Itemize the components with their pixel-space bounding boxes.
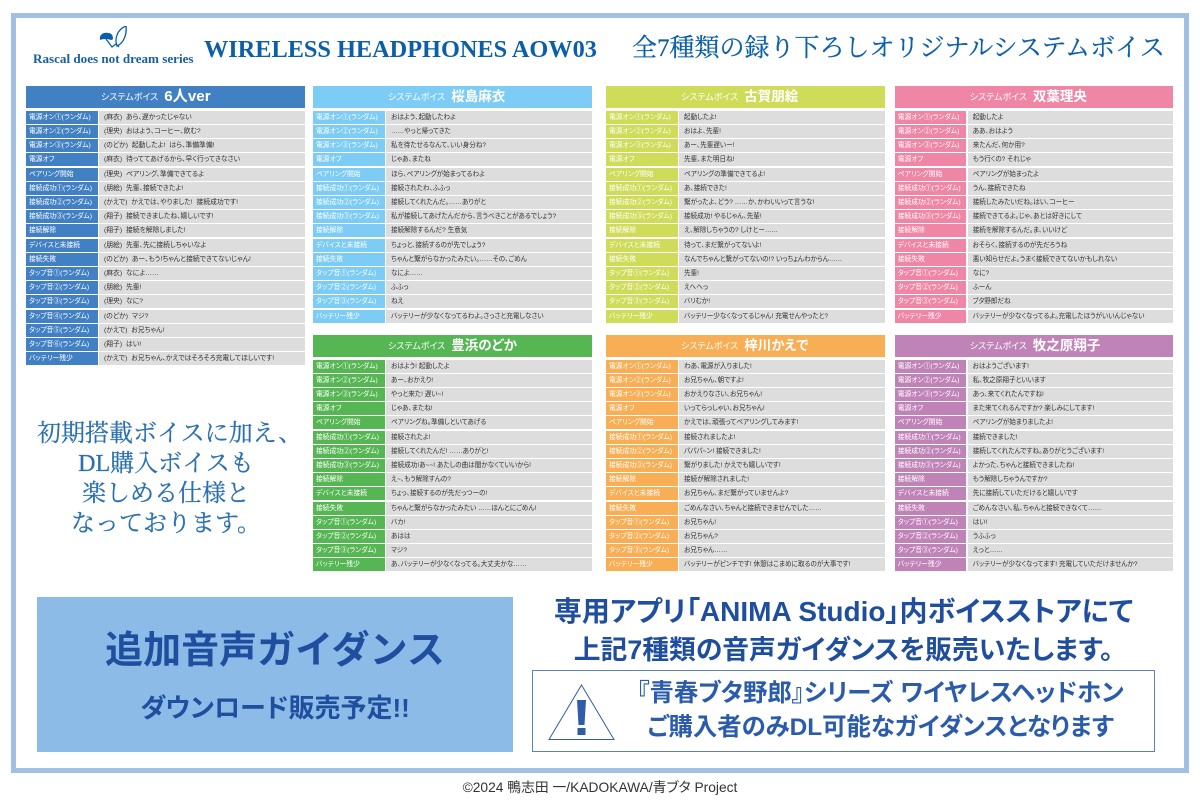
panel: 豊浜のどか: 接続されたよ! [391,434,431,441]
panel: 桜島麻衣: おはよう、起動したわよ [391,114,456,121]
panel: 桜島麻衣: ほら、ペアリングが始まってるわよ [391,171,485,178]
panel: 桜島麻衣: 接続解除するんだ? 生意気 [391,227,467,234]
panel: 梓川かえで: ペアリング開始 [609,419,654,426]
panel: 梓川かえで: 接続成功①(ランダム) [609,434,672,441]
panel: 豊浜のどか: ペアリングね。準備しといてあげる [391,419,486,426]
panel: 牧之原翔子: 接続成功③(ランダム) [898,462,961,469]
panel: 桜島麻衣: 接続してくれたんだ。……ありがと [391,199,486,206]
callout: purchaser only notice [532,670,1155,752]
panel: 双葉理央 [895,86,1173,323]
panel: 牧之原翔子: また来てくれるんですか? 楽しみにしてます! [973,405,1094,412]
panel: 6人ver: (理央) なに? [104,298,143,305]
panel: 桜島麻衣: じゃあ、またね [391,156,431,163]
panel: 梓川かえで: お兄ちゃん…… [684,547,727,554]
panel: 牧之原翔子: うふふっ [973,533,996,540]
panel: 牧之原翔子: 電源オン①(ランダム) [898,363,959,370]
panel: 双葉理央: 電源オン②(ランダム) [898,128,959,135]
panel: 牧之原翔子: 先に接続していただけると嬉しいです [973,490,1078,497]
panel: 6人ver [26,86,305,365]
panel: 牧之原翔子: 電源オフ [898,405,923,412]
panel: 双葉理央: デバイスと未接続 [898,242,949,249]
panel: 梓川かえで: パパパ~ン! 接続できました! [684,448,761,455]
panel: 豊浜のどか: 接続成功!あ~~! あたしの曲は聞かなくていいから! [391,462,531,469]
logo: Rascal does not dream series [33,26,194,66]
panel: 梓川かえで: タップ音①(ランダム) [609,519,669,526]
panel: 古賀朋絵: 電源オン②(ランダム) [609,128,671,135]
panel: 6人ver: 電源オン①(ランダム) [29,114,91,121]
panel: 桜島麻衣: 私を待たせるなんて、いい身分ね? [391,142,486,149]
panel: 牧之原翔子: ペアリング開始 [898,419,942,426]
panel heading [26,86,304,108]
panel: 6人ver: (のどか) マジ? [104,312,148,320]
panel: 古賀朋絵: なんでちゃんと繋がってないの!? いっちょんわからん…… [684,256,842,263]
panel: additional voice guidance [37,597,513,752]
panel: 桜島麻衣: ねえ [391,298,404,305]
panel: 牧之原翔子: タップ音①(ランダム) [898,519,958,526]
panel: 6人ver: タップ音②(ランダム) [29,284,89,291]
text block: voice note: 楽しめる仕様と [82,481,250,507]
panel: 6人ver: (麻衣) あら、遅かったじゃない [104,114,192,121]
panel: 梓川かえで [606,335,885,571]
panel: 双葉理央: 悪い知らせだよ。うまく接続できてないかもしれない [973,256,1117,263]
panel: 桜島麻衣: ちゃんと繋がらなかったみたい。……その、ごめん [391,256,527,263]
panel heading: システムボイス 豊浜のどか [388,338,517,352]
panel: 梓川かえで: タップ音③(ランダム) [609,547,669,554]
panel: 桜島麻衣 [313,86,592,323]
panel: 古賀朋絵: あー、先輩遅いー! [684,142,734,149]
text block: app store notice: 上記7種類の音声ガイダンスを販売いたします。 [574,635,1113,665]
icon: rabbit [100,26,127,48]
panel: 梓川かえで: 接続解除 [609,476,636,483]
panel heading [606,86,884,108]
panel: 牧之原翔子: もう解除しちゃうんですか? [973,476,1048,483]
panel: 双葉理央: ブタ野郎だね [973,298,1011,305]
panel: 梓川かえで: 電源オン②(ランダム) [609,377,671,384]
panel: 古賀朋絵: 接続成功③(ランダム) [609,213,672,220]
text block: app store notice [554,596,1133,665]
panel: 牧之原翔子: バッテリー残少 [898,561,942,568]
panel: 古賀朋絵: ペアリング開始 [609,171,654,178]
panel: 梓川かえで: バッテリー残少 [609,561,653,568]
panel: 豊浜のどか: タップ音③(ランダム) [316,547,376,554]
panel: 牧之原翔子: バッテリーが少なくなってます! 充電していただけませんか? [973,561,1138,568]
panel: 6人ver: タップ音④(ランダム) [29,312,89,320]
panel heading: システムボイス 梓川かえで [681,338,808,352]
panel: 梓川かえで: ごめんなさい、ちゃんと接続できませんでした…… [684,505,822,512]
panel: 6人ver: 電源オン②(ランダム) [29,128,91,135]
panel: 牧之原翔子 [895,335,1173,571]
panel: 豊浜のどか: 接続成功②(ランダム) [316,448,379,455]
panel: 双葉理央: 接続失敗 [898,256,925,263]
panel: 桜島麻衣: 電源オン③(ランダム) [316,142,378,149]
panel: 豊浜のどか: おはよう! 起動したよ [391,363,450,370]
panel: 豊浜のどか: 電源オン③(ランダム) [316,391,378,398]
panel: 梓川かえで: かえでは、頑張ってペアリングしてみます! [684,419,798,426]
panel: 双葉理央: ペアリングが始まったよ [973,171,1039,178]
panel: 桜島麻衣: 接続成功②(ランダム) [316,199,379,206]
panel: 梓川かえで: お兄ちゃん! [684,519,716,526]
panel heading [606,334,884,357]
panel: 豊浜のどか: 接続失敗 [316,505,343,512]
panel: 古賀朋絵: 接続成功①(ランダム) [609,185,672,192]
panel: 牧之原翔子: 電源オン③(ランダム) [898,391,959,398]
panel: 梓川かえで: 接続が解除されました! [684,476,749,483]
panel: 6人ver: (のどか) 起動したよ! はら、準備準備! [104,142,215,149]
panel: 豊浜のどか: 接続解除 [316,476,343,483]
panel: 桜島麻衣: 接続されたわ、ふふっ [391,185,450,192]
panel: 牧之原翔子: ごめんなさい、私、ちゃんと接続できなくて…… [973,505,1101,512]
panel: 6人ver: (理央) おはよう、コーヒー、飲む? [104,128,201,135]
panel: 双葉理央: バッテリー残少 [898,312,942,320]
panel: 豊浜のどか: タップ音②(ランダム) [316,533,376,540]
panel: 桜島麻衣: デバイスと未接続 [316,242,367,249]
panel: 豊浜のどか: ちょっ、接続するのが先だっつーの! [391,490,487,497]
panel: 梓川かえで: 接続されましたよ! [684,434,735,441]
panel: 豊浜のどか: 電源オフ [316,405,342,412]
panel: 牧之原翔子: デバイスと未接続 [898,490,949,497]
copyright: ©2024 鴨志田 一/KADOKAWA/青ブタ Project [463,780,737,795]
panel: 桜島麻衣: 私が接続してあげたんだから、言うべきことがあるでしょう? [391,213,556,220]
panel: 双葉理央: 接続成功③(ランダム) [898,213,961,220]
text block: voice note: なっております。 [71,511,261,537]
panel: 6人ver: バッテリー残少 [29,355,73,362]
panel: 桜島麻衣: 接続失敗 [316,256,343,263]
panel: 古賀朋絵: おはよ、先輩! [684,128,721,135]
panel: 古賀朋絵: 繋がったよ、どう? ……か、かわいいって言うな! [684,199,814,206]
panel: 梓川かえで: お兄ちゃん、まだ繋がっていませんよ? [684,490,788,497]
panel: 牧之原翔子: 電源オン②(ランダム) [898,377,959,384]
panel: 双葉理央: 接続したみたいだね。はい、コーヒー [973,199,1075,206]
panel: 古賀朋絵: ペアリングの準備できてるよ! [684,171,765,178]
panel: 豊浜のどか: あー、おかえり! [391,377,433,384]
notice text: ご購入者のみDL可能なガイダンスとなります [647,714,1114,741]
panel: 古賀朋絵: デバイスと未接続 [609,242,660,249]
panel: 豊浜のどか: 接続してくれたんだ! ……ありがと! [391,448,489,455]
panel: 豊浜のどか: バッテリー残少 [316,561,360,568]
panel: 古賀朋絵: 電源オン①(ランダム) [609,114,671,121]
text block: app store notice: 専用アプリ「ANIMA Studio」内ボイスストアにて [554,596,1133,627]
panel: 古賀朋絵: 接続解除 [609,227,636,234]
panel: 6人ver: (朋絵) 先輩、接続できたよ! [104,185,183,192]
panel: 桜島麻衣: ふふっ [391,284,409,291]
panel: 双葉理央: 接続成功②(ランダム) [898,199,961,206]
panel: 6人ver: デバイスと未接続 [29,242,80,249]
panel: 牧之原翔子: よかった、ちゃんと接続できましたね! [973,462,1074,469]
panel: 牧之原翔子: タップ音③(ランダム) [898,547,958,554]
panel: 梓川かえで: お兄ちゃん? [684,533,718,540]
panel: 双葉理央: タップ音②(ランダム) [898,284,958,291]
panel: 古賀朋絵: あ、接続できた! [684,185,727,192]
panel heading: システムボイス 桜島麻衣 [388,89,505,104]
panel: 豊浜のどか: バカ! [391,519,405,526]
panel: 6人ver: 電源オフ [29,156,55,163]
panel: 桜島麻衣: 接続成功①(ランダム) [316,185,379,192]
panel: 牧之原翔子: ペアリングが始まりましたよ! [973,419,1053,426]
panel: 6人ver: 接続失敗 [29,256,56,263]
panel: 双葉理央: バッテリーが少なくなってるよ。充電したほうがいいんじゃない [973,312,1144,320]
panel: 6人ver: (かえで) お兄ちゃん、かえではそろそろ充電してほしいです! [104,355,274,362]
text block: voice note: 初期搭載ボイスに加え、 [37,421,302,447]
panel: 6人ver: 接続解除 [29,227,56,234]
panel: 梓川かえで: タップ音②(ランダム) [609,533,669,540]
panel: 梓川かえで: わあ、電源が入りました! [684,363,752,370]
panel: 梓川かえで: 接続成功②(ランダム) [609,448,672,455]
text: download sale: ダウンロード販売予定!! [140,693,410,723]
panel: 6人ver: タップ音①(ランダム) [29,270,89,277]
panel: 桜島麻衣: 電源オフ [316,156,342,163]
panel heading [313,334,592,357]
panel: 6人ver: 接続成功②(ランダム) [29,199,92,206]
panel: 梓川かえで: おかえりなさい、お兄ちゃん! [684,391,762,398]
panel: 梓川かえで: 接続失敗 [609,505,636,512]
panel: 梓川かえで: いってらっしゃい、お兄ちゃん! [684,405,765,412]
panel: 6人ver: (朋絵) 先輩! [104,284,142,291]
panel: 古賀朋絵: 接続成功②(ランダム) [609,199,672,206]
panel: 双葉理央: 電源オン①(ランダム) [898,114,959,121]
panel: 古賀朋絵: タップ音②(ランダム) [609,284,669,291]
panel: 牧之原翔子: タップ音②(ランダム) [898,533,958,540]
panel heading: システムボイス 6人ver [101,88,211,105]
panel: 牧之原翔子: 接続解除 [898,476,925,483]
panel: 豊浜のどか: じゃあ、またね! [391,405,433,412]
panel: 桜島麻衣: タップ音①(ランダム) [316,270,376,277]
panel: 豊浜のどか: タップ音①(ランダム) [316,519,376,526]
panel: 6人ver: タップ音⑤(ランダム) [29,327,89,334]
panel: 双葉理央: おそらく、接続するのが先だろうね [973,242,1067,249]
panel: 双葉理央: タップ音③(ランダム) [898,298,958,305]
panel: 牧之原翔子: 接続成功①(ランダム) [898,434,961,441]
panel: 牧之原翔子: 接続できました! [973,434,1018,441]
panel: 桜島麻衣: なによ…… [391,270,423,277]
panel: 豊浜のどか: ちゃんと繋がらなかったみたい ……ほんとにごめん! [391,505,536,512]
panel: 豊浜のどか: デバイスと未接続 [316,490,367,497]
panel: 6人ver: (麻衣) なによ…… [104,270,159,277]
panel: 古賀朋絵: バリむか! [684,298,710,305]
panel: 双葉理央: 接続成功①(ランダム) [898,185,961,192]
panel: 桜島麻衣: 電源オン②(ランダム) [316,128,378,135]
panel: 6人ver: 電源オン③(ランダム) [29,142,91,149]
subtitle: 全7種類の録り下ろしオリジナルシステムボイス [632,35,1165,62]
heading: additional voice guidance: 追加音声ガイダンス [105,630,445,672]
panel: 双葉理央: 来たんだ、何か用? [973,142,1025,149]
panel: 6人ver: (朋絵) 先輩、先に接続しちゃいなよ [104,242,206,249]
panel heading: システムボイス 古賀朋絵 [681,89,798,104]
panel: 牧之原翔子: えっと…… [973,547,1003,554]
text block: voice note: DL購入ボイスも [78,451,254,477]
panel: 6人ver: (かえで) かえでは、やりました! 接続成功です! [104,199,238,206]
panel: 桜島麻衣: ちょっと、接続するのが先でしょう? [391,242,485,249]
panel: 古賀朋絵: バッテリー少なくなってるじゃん! 充電せんやったと? [684,312,828,320]
notice text: 『青春ブタ野郎』シリーズ ワイヤレスヘッドホン [637,680,1124,707]
panel: 牧之原翔子: 接続失敗 [898,505,925,512]
panel: 双葉理央: 電源オフ [898,156,923,163]
panel: 双葉理央: なに? [973,270,989,277]
panel: 古賀朋絵: 電源オフ [609,156,635,163]
title: WIRELESS HEADPHONES AOW03 [204,36,597,63]
panel: 豊浜のどか [313,335,592,571]
panel: 古賀朋絵: 起動したよ! [684,114,717,121]
panel: 6人ver: (のどか) あー、もう!ちゃんと接続できてないじゃん! [104,256,251,263]
panel: 双葉理央: ペアリング開始 [898,171,942,178]
panel: 桜島麻衣: 接続解除 [316,227,343,234]
panel: 牧之原翔子: はい! [973,519,987,526]
panel: 6人ver: (理央) ペアリング、準備できてるよ [104,171,204,178]
panel: 6人ver: (麻衣) 待っててあげるから、早く行ってきなさい [104,156,240,163]
panel: 6人ver: (翔子) はい! [104,341,141,348]
panel: 古賀朋絵 [606,86,885,323]
panel: 双葉理央: 接続できてるよ。じゃ、あとは好きにして [973,213,1082,220]
panel: 双葉理央: 起動したよ [973,114,1004,121]
panel: 桜島麻衣: 電源オン①(ランダム) [316,114,378,121]
panel: 牧之原翔子: 私、牧之原翔子といいます [973,377,1046,384]
panel: 豊浜のどか: 接続成功③(ランダム) [316,462,379,469]
panel: 牧之原翔子: 接続してくれたんですね。ありがとうございます! [973,448,1104,455]
panel: 古賀朋絵: 先輩! [684,270,699,277]
panel: 豊浜のどか: 接続成功①(ランダム) [316,434,379,441]
panel: 古賀朋絵: 接続失敗 [609,256,636,263]
panel: 古賀朋絵: 待って、まだ繋がってないよ! [684,242,762,249]
panel: 梓川かえで: 繋がりました! かえでも嬉しいです! [684,462,781,469]
text block: voice note [37,420,302,537]
panel: 桜島麻衣: タップ音③(ランダム) [316,298,376,305]
panel: 桜島麻衣: バッテリー残少 [316,312,360,320]
panel heading [895,86,1173,108]
panel heading [313,86,592,108]
panel: 梓川かえで: 電源オフ [609,405,635,412]
panel: 桜島麻衣: ……やっと帰ってきた [391,128,451,135]
panel: 6人ver: (かえで) お兄ちゃん! [104,327,164,334]
panel: 梓川かえで: 電源オン①(ランダム) [609,363,671,370]
panel: 双葉理央: もう行くの? それじゃ [973,156,1031,163]
panel: 双葉理央: 電源オン③(ランダム) [898,142,959,149]
panel: 梓川かえで: バッテリーがピンチです! 休憩はこまめに取るのが大事です! [684,561,850,568]
panel: 古賀朋絵: バッテリー残少 [609,312,653,320]
panel: 双葉理央: うん、接続できたね [973,185,1026,192]
panel: 豊浜のどか: え~、もう解除すんの? [391,476,451,483]
panel: 牧之原翔子: あっ、来てくれたんですね! [973,391,1044,398]
panel: 桜島麻衣: バッテリーが少なくなってるわよ。さっさと充電しなさい [391,312,544,320]
panel: 6人ver: タップ音⑥(ランダム) [29,341,89,348]
panel: 梓川かえで: お兄ちゃん、朝ですよ! [684,377,744,384]
panel: 桜島麻衣: ペアリング開始 [316,171,361,178]
panel: 古賀朋絵: えへへっ [684,284,708,291]
panel: 古賀朋絵: タップ音③(ランダム) [609,298,669,305]
panel: 6人ver: 接続成功①(ランダム) [29,185,92,192]
panel heading [895,334,1173,357]
panel: 6人ver: タップ音③(ランダム) [29,298,89,305]
panel: 牧之原翔子: おはようございます! [973,363,1029,370]
panel: 6人ver: ペアリング開始 [29,171,74,178]
panel: 6人ver: 接続成功③(ランダム) [29,213,92,220]
panel: 6人ver: (翔子) 接続できましたね、嬉しいです! [104,213,214,220]
panel: 古賀朋絵: 電源オン③(ランダム) [609,142,671,149]
panel: 古賀朋絵: え、解除しちゃうの? しけとー…… [684,227,778,234]
panel heading: システムボイス 双葉理央 [970,89,1087,104]
panel: 双葉理央: タップ音①(ランダム) [898,270,958,277]
panel: 豊浜のどか: やっと来た! 遅い~! [391,391,443,398]
panel: 梓川かえで: 電源オン③(ランダム) [609,391,671,398]
icon: warning triangle [548,684,615,740]
panel: 双葉理央: ふーん [973,284,991,291]
panel: 豊浜のどか: 電源オン①(ランダム) [316,363,378,370]
panel: 豊浜のどか: マジ? [391,547,407,554]
panel: 牧之原翔子: 接続成功②(ランダム) [898,448,961,455]
panel: 双葉理央: ああ、おはよう [973,128,1013,135]
panel: 6人ver: (翔子) 接続を解除しました! [104,227,186,234]
panel: 古賀朋絵: タップ音①(ランダム) [609,270,669,277]
panel heading: システムボイス 牧之原翔子 [970,338,1100,352]
panel: 豊浜のどか: 電源オン②(ランダム) [316,377,378,384]
panel: 桜島麻衣: 接続成功③(ランダム) [316,213,379,220]
panel: 双葉理央: 接続解除 [898,227,925,234]
panel: 古賀朋絵: 接続成功! やるじゃん、先輩! [684,213,762,220]
panel: 豊浜のどか: ペアリング開始 [316,419,361,426]
panel: 桜島麻衣: タップ音②(ランダム) [316,284,376,291]
panel: 梓川かえで: デバイスと未接続 [609,490,660,497]
panel: 梓川かえで: 接続成功③(ランダム) [609,462,672,469]
notice text [637,680,1124,741]
panel: 豊浜のどか: あはは [391,533,411,540]
panel: 古賀朋絵: 先輩、また明日ね! [684,156,735,163]
panel: 豊浜のどか: あ、バッテリーが少なくなってる。大丈夫かな…… [391,561,527,568]
panel: 双葉理央: 接続を解除するんだ。ま、いいけど [973,227,1067,234]
logo text: Rascal does not dream series [33,50,194,66]
